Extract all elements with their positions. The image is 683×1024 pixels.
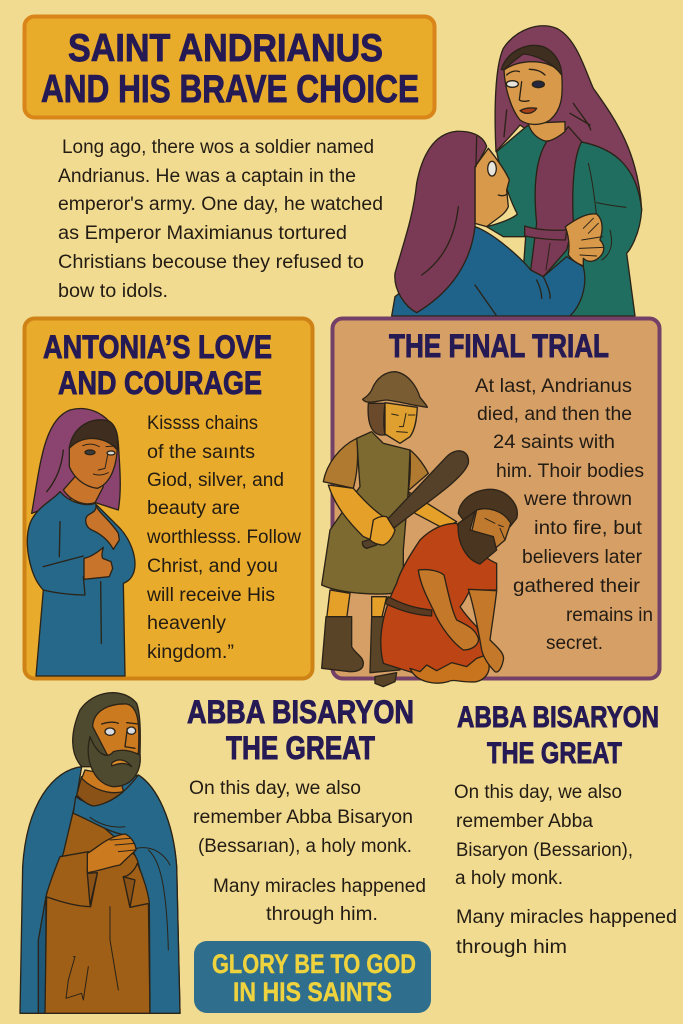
callout: Glory be to God in His saints: IN HIS SAINTS bbox=[233, 977, 392, 1007]
text: Abba Bisaryon description: through him. bbox=[266, 904, 378, 925]
text: Antonia's words: kingdom.” bbox=[147, 642, 234, 663]
title banner bbox=[24, 16, 434, 118]
intro text block: Christians becouse they refused to bbox=[58, 252, 364, 273]
text: Antonia's words: Kissss chains bbox=[147, 413, 258, 434]
text: final trial story: secret. bbox=[546, 633, 603, 654]
heading: Antonia bbox=[43, 329, 272, 401]
text: Antonia's words: worthlesss. Follow bbox=[146, 527, 301, 548]
heading: Antonia: ANTONIA’S LOVE bbox=[43, 329, 272, 365]
heading: Abba Bisaryon repeated bbox=[457, 701, 659, 770]
heading: Antonia: AND COURAGE bbox=[58, 365, 262, 401]
text: Antonia's words bbox=[146, 413, 301, 663]
text: Abba Bisaryon description repeated: a holy monk. bbox=[455, 868, 563, 889]
text: Abba Bisaryon description bbox=[189, 778, 426, 925]
heading: Abba Bisaryon: THE GREAT bbox=[226, 730, 375, 766]
intro text block: Andrianus. He was a captain in the bbox=[58, 166, 356, 187]
text: final trial story: gathered their bbox=[513, 576, 641, 597]
text: final trial story: were thrown bbox=[523, 489, 632, 510]
icon: Antonia figure bbox=[27, 409, 135, 676]
text: Abba Bisaryon description repeated: On this day, we also bbox=[454, 782, 622, 803]
text: final trial story: believers later bbox=[522, 547, 643, 568]
text: Abba Bisaryon description: remember Abba Bisaryon bbox=[193, 807, 413, 828]
text: final trial story: into fire, but bbox=[534, 518, 643, 539]
text: final trial story: died, and then the bbox=[477, 404, 632, 425]
text: Abba Bisaryon description repeated: remember Abba bbox=[456, 811, 593, 832]
section: Abba Bisaryon, right column bbox=[454, 701, 677, 958]
text: final trial story: remains in bbox=[566, 605, 653, 626]
text: Abba Bisaryon description repeated: Many miracles happened bbox=[456, 907, 677, 928]
panel: the final trial bbox=[322, 318, 660, 687]
heading: Abba Bisaryon: ABBA BISARYON bbox=[187, 694, 414, 730]
text: final trial story: him. Thoir bodies bbox=[496, 461, 644, 482]
text: Antonia's words: Christ, and you bbox=[147, 556, 278, 577]
text: final trial story: 24 saints with bbox=[493, 432, 615, 453]
text: Abba Bisaryon description: On this day, we also bbox=[189, 778, 361, 799]
heading: Abba Bisaryon bbox=[187, 694, 414, 766]
callout: Glory be to God in His saints bbox=[194, 941, 431, 1013]
text: Abba Bisaryon description repeated: through him bbox=[456, 937, 567, 958]
text: Abba Bisaryon description repeated: Bisaryon (Bessarion), bbox=[456, 840, 633, 861]
section: Abba Bisaryon, middle column bbox=[187, 694, 426, 925]
intro text block: as Emperor Maximianus tortured bbox=[58, 223, 347, 244]
text: Antonia's words: Giod, silver, and bbox=[147, 470, 284, 491]
illustration: two women, Antonia pleading with her companion bbox=[392, 26, 642, 316]
title banner: AND HIS BRAVE CHOICE bbox=[41, 68, 419, 111]
title banner: SAINT ANDRIANUS bbox=[68, 27, 383, 70]
icon: soldier with club and kneeling saint bbox=[322, 372, 517, 687]
intro text block bbox=[58, 137, 383, 302]
text: Antonia's words: heavenly bbox=[147, 613, 227, 634]
intro text block: Long ago, there wos a soldier named bbox=[62, 137, 374, 158]
text: Antonia's words: will receive His bbox=[146, 585, 275, 606]
panel: Antonia's love and courage bbox=[24, 318, 312, 678]
text: Abba Bisaryon description repeated bbox=[454, 782, 677, 958]
heading: Abba Bisaryon repeated: THE GREAT bbox=[487, 737, 622, 770]
text: Abba Bisaryon description: Many miracles happened bbox=[213, 876, 426, 897]
text: final trial story bbox=[475, 376, 653, 654]
callout: Glory be to God in His saints: GLORY BE TO GOD bbox=[212, 949, 416, 979]
icon: Abba Bisaryon figure bbox=[20, 693, 180, 1013]
text: Antonia's words: of the saınts bbox=[147, 442, 255, 463]
intro text block: emperor's army. One day, he watched bbox=[58, 194, 383, 215]
heading: final trial: THE FINAL TRIAL bbox=[389, 328, 609, 364]
intro text block: bow to idols. bbox=[58, 281, 168, 302]
text: Abba Bisaryon description: (Bessarıan), a holy monk. bbox=[198, 836, 412, 857]
text: Antonia's words: beauty are bbox=[147, 498, 240, 519]
text: final trial story: At last, Andrianus bbox=[475, 376, 632, 397]
